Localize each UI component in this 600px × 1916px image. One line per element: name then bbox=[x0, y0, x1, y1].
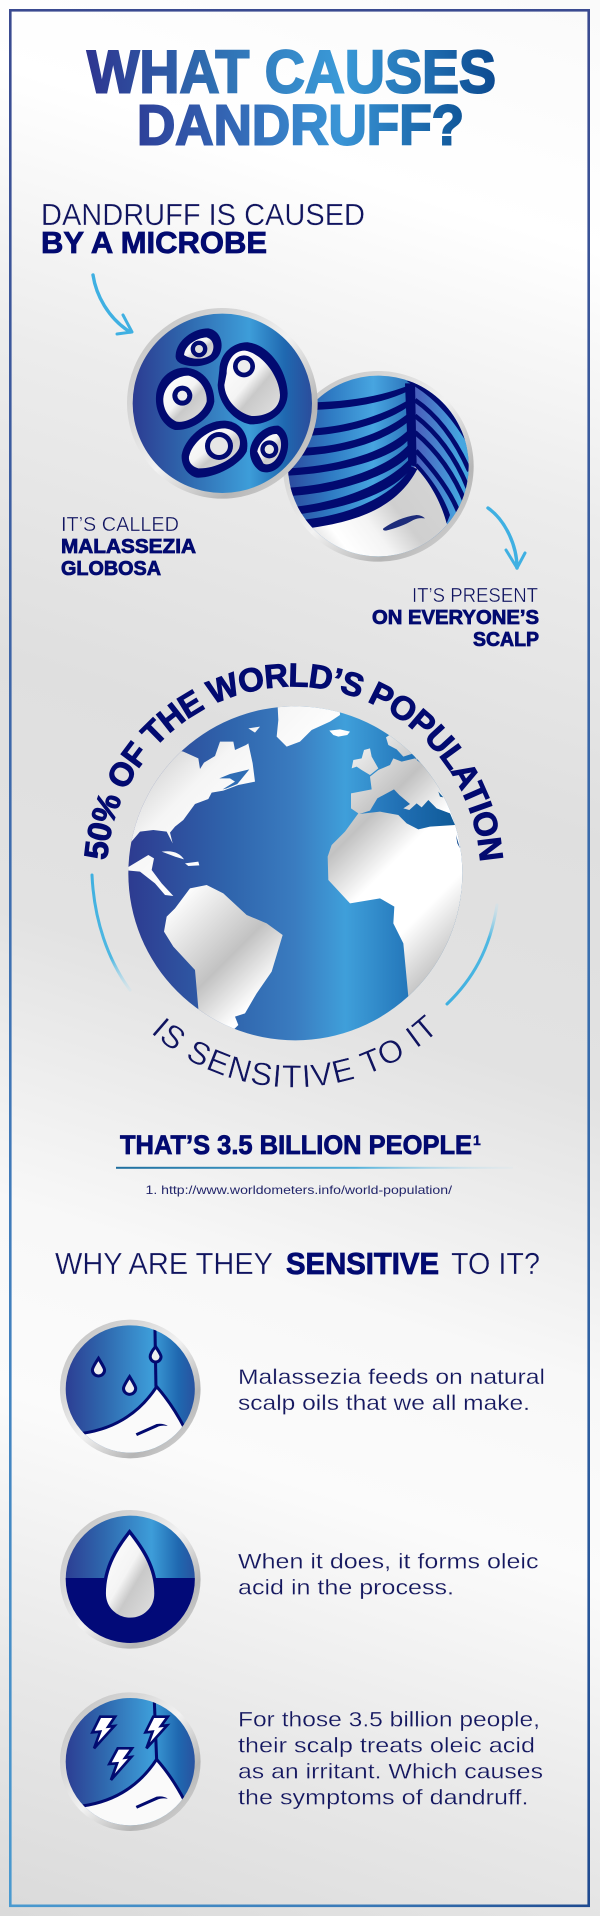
arctic island bbox=[248, 727, 260, 733]
icon: irritated scalp bbox=[60, 1692, 209, 1833]
title: WHAT CAUSES bbox=[87, 38, 496, 106]
footnote: 1. http://www.worldometers.info/world-population/ bbox=[146, 1183, 453, 1197]
eyebrow bbox=[136, 1424, 168, 1436]
cell: right bbox=[250, 426, 288, 472]
oil drops bbox=[92, 1347, 161, 1394]
scalp bbox=[84, 1762, 183, 1826]
text: irritant symptoms bbox=[238, 1708, 543, 1809]
greenland bbox=[276, 706, 340, 747]
label: it's present on everyone's scalp: SCALP bbox=[473, 629, 539, 651]
label: it's called malassezia globosa: GLOBOSA bbox=[61, 558, 161, 580]
black sea bbox=[438, 792, 443, 797]
arc stroke: left bbox=[92, 875, 130, 990]
hair parting bbox=[155, 1327, 156, 1387]
hispaniola bbox=[185, 862, 199, 866]
label: it's present on everyone's scalp: ON EVERYONE’S bbox=[372, 607, 539, 629]
cell: bottom bbox=[182, 421, 247, 478]
label: it's called malassezia globosa bbox=[61, 514, 196, 580]
cell: large bbox=[218, 342, 288, 424]
text: malassezia feeds: scalp oils that we all make. bbox=[238, 1391, 530, 1415]
eyebrow bbox=[136, 1796, 168, 1809]
icon: microbe cells bbox=[127, 308, 318, 499]
underline rule bbox=[116, 1167, 513, 1169]
right hair panel bbox=[412, 382, 469, 538]
eyebrow bbox=[383, 515, 425, 531]
text: irritant symptoms: their scalp treats oleic acid bbox=[238, 1734, 535, 1758]
text: irritant symptoms: as an irritant. Which causes bbox=[238, 1759, 543, 1783]
text: forms oleic acid: acid in the process. bbox=[238, 1576, 454, 1600]
heading: dandruff is caused by a microbe bbox=[41, 198, 365, 260]
label: it's called malassezia globosa: MALASSEZIA bbox=[61, 536, 196, 558]
hair strands right bbox=[415, 400, 469, 514]
statistic: 3.5 billion people: 1 bbox=[473, 1132, 481, 1148]
iceland bbox=[329, 729, 350, 737]
text: irritant symptoms: the symptoms of dandruff. bbox=[238, 1785, 528, 1809]
label: it's present on everyone's scalp bbox=[372, 585, 539, 651]
icon: oil drop bbox=[60, 1510, 201, 1649]
heading: why are they sensitive bbox=[55, 1247, 540, 1281]
british isles bbox=[352, 748, 378, 775]
crown bbox=[406, 380, 465, 440]
text: malassezia feeds bbox=[238, 1365, 545, 1415]
parting bbox=[405, 383, 417, 467]
scalp bbox=[312, 466, 448, 556]
south america bbox=[164, 885, 283, 1029]
title bbox=[87, 38, 496, 158]
text: malassezia feeds: Malassezia feeds on natural bbox=[238, 1365, 545, 1389]
scalp bbox=[84, 1389, 183, 1453]
icon: hair and scalp bbox=[284, 371, 474, 562]
globe bbox=[128, 706, 462, 1040]
text: forms oleic acid bbox=[238, 1550, 539, 1600]
north america bbox=[131, 742, 255, 844]
heading: dandruff is caused by a microbe: DANDRUFF IS CAUSED bbox=[41, 198, 365, 232]
icon: oil on scalp bbox=[60, 1320, 209, 1460]
title: DANDRUFF? bbox=[137, 94, 464, 158]
arc text: 50% of the world's population: 50% OF THE WORLD’S POPULATION bbox=[84, 663, 504, 861]
europe and africa bbox=[328, 758, 462, 996]
cuba bbox=[162, 851, 184, 859]
arrow: to microbe bbox=[93, 275, 132, 334]
red sea bbox=[456, 835, 460, 848]
mediterranean sea bbox=[359, 789, 455, 829]
lightning bolts bbox=[92, 1717, 168, 1780]
hairline right bbox=[415, 463, 450, 523]
heading: why are they sensitive: TO IT? bbox=[451, 1247, 540, 1281]
label: it's called malassezia globosa: IT’S CALLED bbox=[61, 514, 179, 536]
cell: top bbox=[176, 328, 222, 366]
statistic: 3.5 billion people: THAT’S 3.5 BILLION PEOPLE bbox=[120, 1130, 472, 1160]
heading: dandruff is caused by a microbe: BY A MICROBE bbox=[41, 226, 267, 260]
arc stroke: right bbox=[447, 905, 497, 1004]
hair parting bbox=[154, 1699, 157, 1759]
heading: why are they sensitive: SENSITIVE bbox=[286, 1247, 439, 1281]
arc text: is sensitive to it: IS SENSITIVE TO IT bbox=[152, 1014, 433, 1088]
heading: why are they sensitive: WHY ARE THEY bbox=[55, 1247, 273, 1281]
cell: left bbox=[156, 368, 214, 430]
text: forms oleic acid: When it does, it forms oleic bbox=[238, 1550, 539, 1574]
arrow: to scalp label bbox=[488, 508, 525, 568]
gulf of st lawrence bbox=[219, 769, 249, 789]
label: it's present on everyone's scalp: IT’S PRESENT bbox=[412, 585, 538, 607]
hair strands left bbox=[283, 386, 417, 528]
scandinavia bbox=[386, 735, 418, 760]
text: irritant symptoms: For those 3.5 billion people, bbox=[238, 1708, 540, 1732]
central america bbox=[123, 855, 173, 896]
